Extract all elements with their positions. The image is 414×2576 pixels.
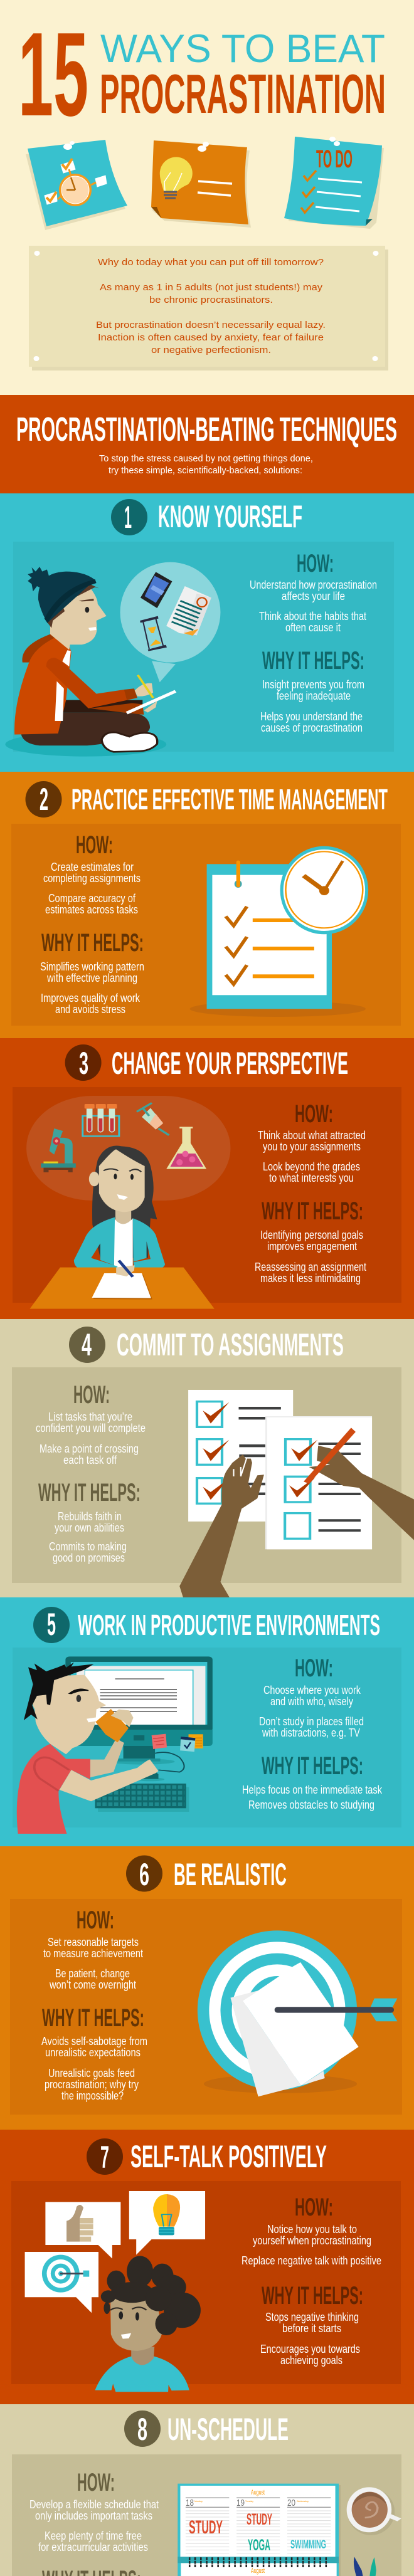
intro panel: But procrastination doesn’t necessarily equal lazy. xyxy=(96,320,326,330)
how block: completing assignments xyxy=(43,872,141,885)
illustration: calendar, coffee and pens: August xyxy=(251,2489,265,2496)
title number 15: 15 xyxy=(18,8,88,141)
how block xyxy=(259,1654,364,1739)
how block: HOW: xyxy=(73,1381,110,1409)
intro panel: Inaction is often caused by anxiety, fear of failure xyxy=(98,332,324,343)
number badge 7: 7 xyxy=(100,2140,109,2175)
number badge 8: 8 xyxy=(137,2412,147,2447)
why it helps block: Removes obstacles to studying xyxy=(248,1799,374,1811)
how block: estimates across tasks xyxy=(45,903,138,916)
illustration: calendar, coffee and pens: STUDY xyxy=(189,2517,223,2538)
why it helps block: achieving goals xyxy=(280,2354,342,2367)
panel: tip 6 be realistic xyxy=(0,1846,414,2130)
number badge 4: 4 xyxy=(82,1327,92,1362)
how block: Don’t study in places filled xyxy=(259,1715,364,1728)
why it helps block: Stops negative thinking xyxy=(265,2311,359,2323)
how block: Replace negative talk with positive xyxy=(242,2254,381,2267)
illustration: calendar, coffee and pens: Wednesday xyxy=(297,2500,309,2503)
how block: confident you will complete xyxy=(36,1422,146,1434)
why it helps block: Helps focus on the immediate task xyxy=(242,1784,383,1796)
title line: ways to beat: WAYS TO BEAT xyxy=(100,27,385,71)
how block xyxy=(242,2194,381,2267)
intro panel: As many as 1 in 5 adults (not just students!) may xyxy=(100,282,323,293)
how block: HOW: xyxy=(77,2469,115,2496)
how block: Think about what attracted xyxy=(258,1129,366,1142)
how block: and with who, wisely xyxy=(270,1695,353,1708)
how block: for extracurricular activities xyxy=(38,2541,148,2553)
number badge 4 xyxy=(69,1327,105,1363)
illustration: calendar, coffee and pens: SWIMMING xyxy=(290,2538,326,2552)
why it helps block: Rebuilds faith in xyxy=(58,1510,122,1523)
why it helps block: Insight prevents you from xyxy=(262,678,364,691)
number badge 5: 5 xyxy=(47,1607,56,1642)
why it helps block: before it starts xyxy=(282,2322,341,2335)
why it helps block xyxy=(260,647,364,734)
illustration: calendar, coffee and pens: 20 xyxy=(287,2498,295,2508)
how block: yourself when procrastinating xyxy=(253,2234,371,2247)
why it helps block xyxy=(260,2282,363,2367)
illustration: calendar, coffee and pens: Tuesday xyxy=(245,2500,253,2503)
why it helps block xyxy=(255,1197,366,1285)
panel: tip 4 commit to assignments xyxy=(0,1319,414,1599)
why it helps block: Improves quality of work xyxy=(41,992,141,1004)
how block: to measure achievement xyxy=(43,1947,143,1960)
number badge 5 xyxy=(33,1607,70,1643)
why it helps block: Avoids self-sabotage from xyxy=(41,2035,147,2048)
icon: sticky note light bulb xyxy=(151,140,251,228)
how block: each task off xyxy=(63,1454,117,1466)
panel: tip 3 change your perspective xyxy=(0,1038,414,1319)
why it helps block: makes it less intimidating xyxy=(260,1272,361,1285)
how block xyxy=(258,1100,366,1184)
number badge 2 xyxy=(25,781,61,817)
how block xyxy=(29,2469,159,2553)
illustration: calendar, coffee and pens xyxy=(178,2484,401,2576)
header xyxy=(18,8,388,371)
how block: with distractions, e.g. TV xyxy=(262,1727,360,1739)
how block: Keep plenty of time free xyxy=(45,2530,142,2542)
icon: sticky note clock xyxy=(26,140,127,230)
why it helps block: good on promises xyxy=(53,1552,125,1564)
icon: sticky note to do: TO DO xyxy=(316,145,353,173)
why it helps block: WHY IT HELPS: xyxy=(42,2004,144,2032)
banner: techniques: try these simple, scientifically-backed, solutions: xyxy=(109,465,302,476)
illustration: student and science xyxy=(26,1096,230,1309)
banner: techniques xyxy=(0,395,414,493)
panel: tip 5 productive environments xyxy=(0,1597,414,1846)
banner: techniques: To stop the stress caused by not getting things done, xyxy=(99,453,313,464)
how block: HOW: xyxy=(77,1906,114,1934)
why it helps block: causes of procrastination xyxy=(261,722,363,734)
how block: Think about the habits that xyxy=(259,610,366,623)
how block: won’t come overnight xyxy=(49,1979,136,1991)
why it helps block xyxy=(41,2004,147,2102)
how block: List tasks that you’re xyxy=(48,1411,132,1423)
why it helps block: Helps you understand the xyxy=(260,710,363,723)
why it helps block: and avoids stress xyxy=(55,1003,125,1016)
how block: Look beyond the grades xyxy=(263,1160,360,1173)
why it helps block xyxy=(38,1479,141,1564)
how block: HOW: xyxy=(295,2194,333,2221)
number badge 1 xyxy=(111,499,147,535)
why it helps block: feeling inadequate xyxy=(277,690,351,702)
illustration: calendar, coffee and pens: YOGA xyxy=(248,2537,270,2554)
how block xyxy=(250,550,377,634)
illustration: clipboard and clock xyxy=(190,846,368,1017)
illustration: calendar, coffee and pens: 19 xyxy=(236,2498,245,2508)
why it helps block: the impossible? xyxy=(61,2090,124,2102)
number badge 6: 6 xyxy=(139,1857,149,1892)
why it helps block xyxy=(40,929,144,1016)
why it helps block: Reassessing an assignment xyxy=(255,1261,366,1273)
illustration: target and arrow xyxy=(198,1930,397,2096)
how block xyxy=(36,1381,146,1466)
heading: BE REALISTIC xyxy=(174,1857,287,1892)
how block: Understand how procrastination xyxy=(250,579,377,591)
illustration: man at computer xyxy=(17,1656,213,1834)
number badge 6 xyxy=(126,1856,162,1892)
why it helps block: WHY IT HELPS: xyxy=(41,929,144,957)
how block: HOW: xyxy=(76,831,113,859)
intro panel: Why do today what you can put off till tomorrow? xyxy=(98,257,324,268)
how block: Set reasonable targets xyxy=(48,1936,139,1948)
why it helps block: Simplifies working pattern xyxy=(40,960,144,973)
how block: HOW: xyxy=(297,550,334,577)
number badge 3 xyxy=(65,1044,102,1081)
why it helps block: WHY IT HELPS: xyxy=(38,1479,141,1506)
how block: Choose where you work xyxy=(263,1684,361,1696)
why it helps block: improves engagement xyxy=(267,1240,357,1253)
illustration: positive thoughts xyxy=(25,2191,205,2392)
illustration: student thinking xyxy=(5,562,220,757)
how block: you to your assignments xyxy=(263,1140,361,1153)
why it helps block: with effective planning xyxy=(46,972,137,984)
how block: HOW: xyxy=(295,1654,333,1682)
how block: HOW: xyxy=(295,1100,333,1128)
illustration: calendar, coffee and pens: August xyxy=(251,2567,265,2575)
how block: Be patient, change xyxy=(55,1967,130,1980)
how block: Compare accuracy of xyxy=(48,892,136,905)
why it helps block: your own abilities xyxy=(55,1522,124,1534)
how block xyxy=(43,831,141,916)
why it helps block xyxy=(242,1752,383,1811)
illustration: calendar, coffee and pens: Monday xyxy=(194,2500,203,2503)
number badge 7 xyxy=(87,2138,123,2175)
intro panel: or negative perfectionism. xyxy=(151,345,271,355)
how block: Develop a flexible schedule that xyxy=(29,2498,159,2511)
panel: tip 1 know yourself xyxy=(0,493,414,772)
panel: tip 8 un-schedule xyxy=(0,2404,414,2576)
why it helps block: Identifying personal goals xyxy=(260,1229,363,1241)
number badge 1: 1 xyxy=(124,500,132,535)
why it helps block: Commits to making xyxy=(49,1540,127,1553)
how block: affects your life xyxy=(282,590,345,602)
number badge 8 xyxy=(124,2410,161,2447)
how block: Create estimates for xyxy=(51,861,134,873)
why it helps block: procrastination; why try xyxy=(45,2078,139,2091)
number badge 3: 3 xyxy=(79,1046,88,1081)
how block: Make a point of crossing xyxy=(40,1443,139,1455)
how block: to what interests you xyxy=(269,1172,354,1184)
intro panel: be chronic procrastinators. xyxy=(149,295,273,305)
heading: UN-SCHEDULE xyxy=(167,2412,289,2447)
illustration: calendar, coffee and pens: 18 xyxy=(186,2498,194,2508)
panel: tip 7 self-talk positively xyxy=(0,2130,414,2404)
number badge 2: 2 xyxy=(40,782,48,817)
how block xyxy=(43,1906,143,1991)
illustration: checklists and hands xyxy=(179,1390,414,1599)
panel: tip 2 time management xyxy=(0,772,414,1038)
icon: sticky note to do xyxy=(284,137,384,229)
how block: often cause it xyxy=(285,621,341,634)
how block: only includes important tasks xyxy=(35,2510,152,2522)
why it helps block: Encourages you towards xyxy=(260,2343,360,2355)
illustration: calendar, coffee and pens: STUDY xyxy=(247,2511,272,2528)
how block: Notice how you talk to xyxy=(267,2223,357,2236)
intro panel xyxy=(29,246,388,371)
why it helps block: Unrealistic goals feed xyxy=(48,2067,135,2079)
why it helps block: unrealistic expectations xyxy=(45,2046,141,2059)
